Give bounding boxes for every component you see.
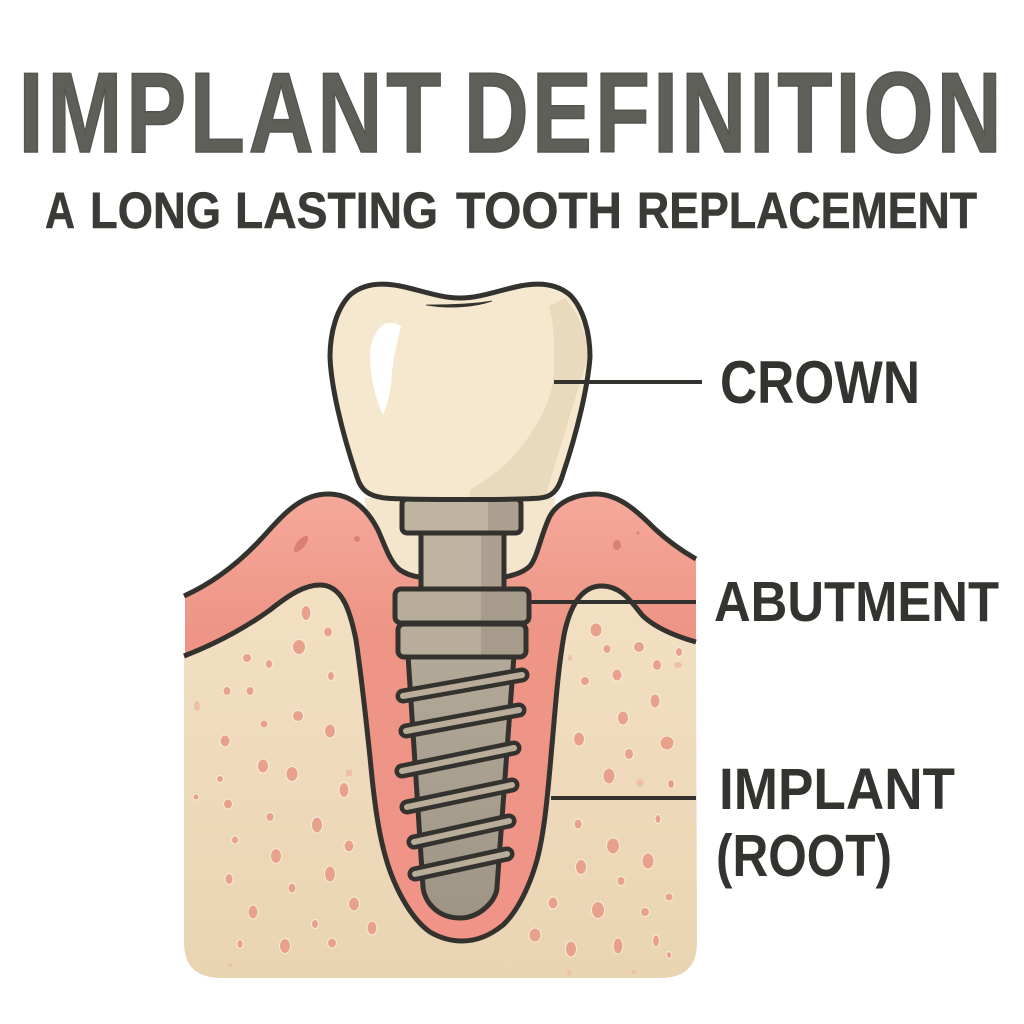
crown highlight xyxy=(370,323,401,415)
leader line: abutment xyxy=(530,600,696,604)
subtitle xyxy=(45,182,977,239)
bone xyxy=(184,585,697,978)
diagram: implant cross-section xyxy=(184,284,697,978)
crown shading xyxy=(470,298,588,497)
title: DEFINITION xyxy=(464,49,1002,176)
thread rings xyxy=(402,675,522,874)
leader line: implant xyxy=(551,796,696,800)
bone speckles xyxy=(193,606,682,958)
label: implant: IMPLANT xyxy=(719,757,955,822)
gum outline right xyxy=(505,494,696,577)
abutment xyxy=(395,499,529,657)
subtitle: TOOTH xyxy=(456,182,622,239)
gum outline left xyxy=(184,494,419,596)
title xyxy=(19,49,1002,176)
neck tissue behind abutment xyxy=(364,498,556,580)
leader line: crown xyxy=(554,380,702,384)
subtitle: A xyxy=(45,182,75,239)
title: IMPLANT xyxy=(19,49,441,176)
crown top mark xyxy=(426,301,492,307)
subtitle: LASTING xyxy=(235,182,438,239)
crown outline xyxy=(330,284,590,500)
subtitle: LONG xyxy=(90,182,221,239)
label: crown: CROWN xyxy=(720,349,920,416)
subtitle: REPLACEMENT xyxy=(637,182,977,239)
label: root: (ROOT) xyxy=(716,823,892,889)
gum marks xyxy=(292,532,640,554)
faint bone speckles xyxy=(194,655,682,976)
bone and pocket outline xyxy=(184,585,696,941)
gum tissue xyxy=(185,494,696,945)
implant root xyxy=(402,655,522,918)
crown xyxy=(330,284,590,500)
